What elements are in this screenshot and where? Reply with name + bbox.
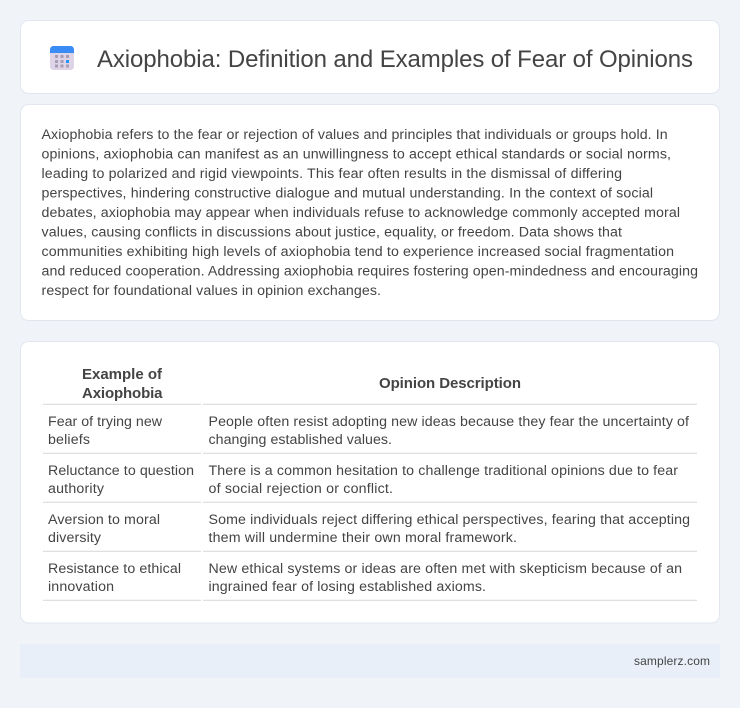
table row 3: Some individuals reject differing ethical perspectives, fearing that accepting bbox=[208, 512, 690, 528]
panel: definition paragraph bbox=[20, 104, 720, 320]
panel: examples table bbox=[20, 342, 720, 623]
table row 1 bbox=[48, 414, 689, 448]
table header: opinion description: Opinion Description bbox=[379, 375, 521, 392]
table row 3: them will undermine their own moral framework. bbox=[208, 530, 517, 546]
text block: paragraph: perspectives, hindering constructive dialogue and mutual understanding. In the context of social bbox=[42, 186, 653, 202]
footer source text: samplerz.com bbox=[634, 654, 710, 668]
table row 1: Fear of trying new bbox=[48, 414, 163, 430]
table row 2: of social rejection or conflict. bbox=[208, 481, 393, 497]
text block: paragraph: values, causing conflicts in discussions about justice, equality, or freedom. Data shows that bbox=[42, 224, 622, 240]
text block: paragraph: debates, axiophobia may appear when individuals refuse to acknowledge commonly accepted moral bbox=[42, 205, 680, 221]
table row 1: changing established values. bbox=[208, 432, 392, 448]
table row 2: authority bbox=[48, 481, 105, 497]
table row 2: There is a common hesitation to challenge traditional opinions due to fear bbox=[208, 463, 678, 479]
table row 2 bbox=[48, 463, 678, 497]
table row 4: Resistance to ethical bbox=[48, 561, 181, 577]
table header: example of axiophobia bbox=[82, 366, 163, 402]
table row 4 bbox=[48, 561, 682, 595]
title: Axiophobia: Definition and Examples of Fear of Opinions bbox=[97, 46, 693, 73]
table row 4: New ethical systems or ideas are often met with skepticism because of an bbox=[208, 561, 682, 577]
text block: paragraph: opinions, axiophobia can manifest as an unwillingness to accept ethical standards or social norms, bbox=[42, 146, 671, 162]
table header: example of axiophobia: Axiophobia bbox=[82, 385, 163, 402]
table header: example of axiophobia: Example of bbox=[82, 366, 163, 383]
text block: paragraph: respect for foundational values in opinion exchanges. bbox=[42, 283, 381, 299]
icon: calendar bbox=[50, 46, 74, 70]
table row 4: innovation bbox=[48, 579, 114, 595]
text block: paragraph: leading to polarized and rigid viewpoints. This fear often results in the dismissal of differing bbox=[42, 166, 622, 182]
table row 4: ingrained fear of losing established axioms. bbox=[208, 579, 486, 595]
table row 3: Aversion to moral bbox=[48, 512, 160, 528]
table row 2: Reluctance to question bbox=[48, 463, 194, 479]
table row 1: People often resist adopting new ideas because they fear the uncertainty of bbox=[208, 414, 689, 430]
footer bbox=[20, 644, 720, 678]
table row 3: diversity bbox=[48, 530, 102, 546]
text block: paragraph: Axiophobia refers to the fear or rejection of values and principles that individuals or groups hold. In bbox=[42, 127, 668, 143]
text block: paragraph: and reduced cooperation. Addressing axiophobia requires fostering open-mindedness and encouraging bbox=[42, 264, 698, 280]
table row 1: beliefs bbox=[48, 432, 90, 448]
text block: paragraph bbox=[42, 127, 698, 299]
text block: paragraph: communities exhibiting high levels of axiophobia tend to experience increased social fragmentation bbox=[42, 244, 674, 260]
panel: title card bbox=[20, 20, 720, 94]
table row 3 bbox=[48, 512, 690, 546]
